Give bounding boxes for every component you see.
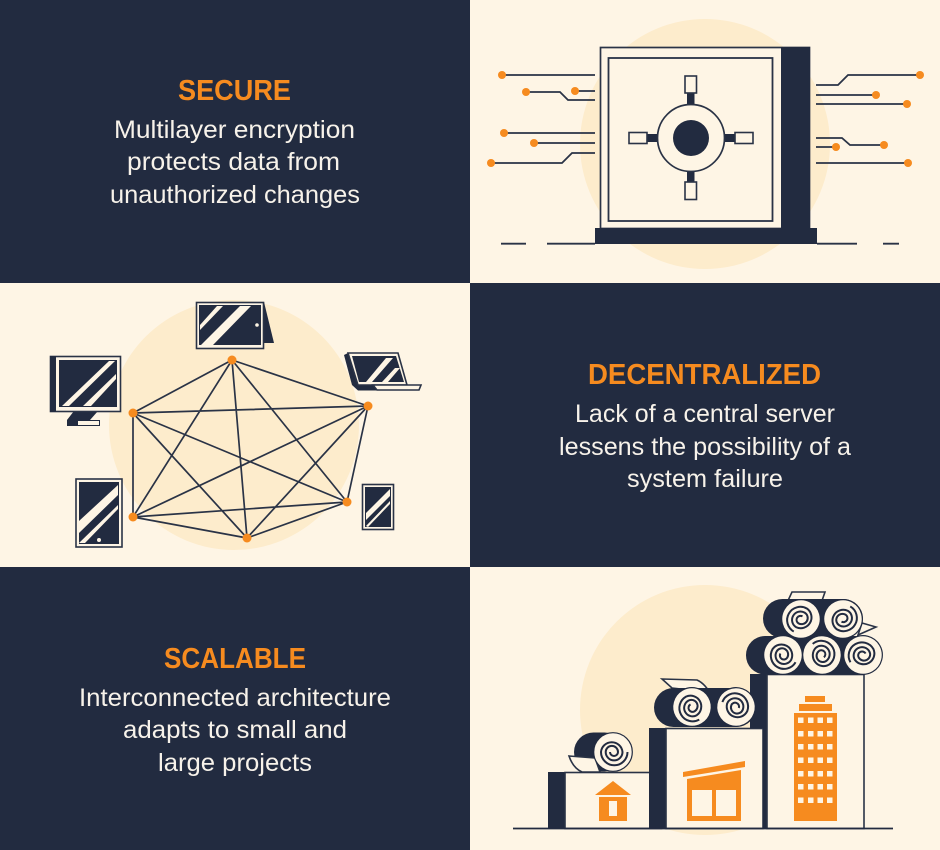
heading: secure: SECURE [178,75,291,107]
panel: secure illustration [470,0,940,283]
heading: decentralized: DECENTRALIZED [588,359,821,391]
icon: desktop monitor [50,356,120,426]
panel: decentralized illustration [0,283,470,567]
text block: decentralized description: Lack of a central server [575,400,835,428]
panel: secure text [0,0,470,283]
background circle [580,19,830,269]
step: medium box with warehouse [649,728,763,828]
text block: secure description: Multilayer encryption [114,116,355,144]
text block: scalable description: adapts to small and [123,716,347,744]
icon: office tower [794,696,837,821]
text block: decentralized description [559,400,851,493]
background circle [580,585,830,835]
icon: laptop [344,353,421,390]
ground line [513,828,893,830]
icon: small right tablet [362,484,394,530]
icon: warehouse [683,761,745,821]
text block: scalable description [79,684,391,777]
icon: single roll [569,732,632,772]
icon: house [595,781,631,821]
background circle [109,300,359,550]
circuit wires: right [816,71,924,167]
vault dial [629,76,753,200]
panel: decentralized text [470,283,940,567]
text block: scalable description: Interconnected architecture [79,684,391,712]
text block: decentralized description: system failure [627,465,783,493]
icon: vault [595,47,817,244]
step: large box with tower [750,674,864,828]
ground line [501,243,899,245]
text block: secure description: unauthorized changes [110,181,360,209]
text block: secure description [110,116,360,209]
panel: scalable text [0,567,470,850]
circuit wires: left [487,71,595,167]
icon: two rolls [654,679,761,733]
text block: scalable description: large projects [158,749,312,777]
icon: top tablet [196,302,274,348]
text block: decentralized description: lessens the possibility of a [559,433,851,461]
icon: stacked rolls [746,592,889,682]
step: small box with house [548,772,662,828]
network mesh [128,356,372,542]
icon: bottom-left tablet [76,479,122,547]
text block: secure description: protects data from [127,148,340,176]
panel: scalable illustration [470,567,940,850]
heading: scalable: SCALABLE [164,643,306,675]
